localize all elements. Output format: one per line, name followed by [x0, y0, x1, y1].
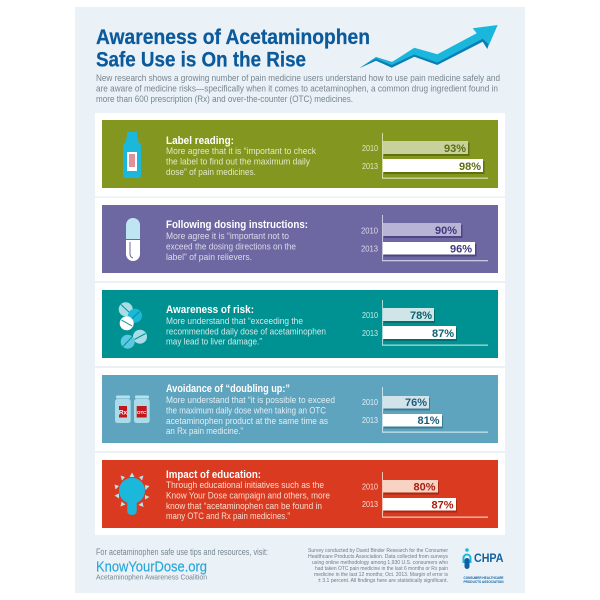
- bar chart: 87%: [431, 500, 454, 512]
- heading: Avoidance of “doubling up:”: [166, 383, 290, 395]
- title: Safe Use is On the Rise: [96, 48, 306, 72]
- bar chart: 78%: [410, 310, 432, 322]
- body text: label” of pain relievers.: [166, 252, 252, 263]
- body text: Know Your Dose campaign and others, more: [166, 490, 330, 502]
- body text: the maximum daily dose when taking an OTC: [166, 406, 326, 416]
- body text: acetaminophen product at the same time as: [166, 416, 328, 427]
- panel: impact of education: [95, 453, 505, 535]
- bar chart: [362, 133, 488, 179]
- survey note: had taken OTC pain medicine in the last 6 months or Rx pain: [315, 566, 448, 572]
- title: Awareness of Acetaminophen: [96, 26, 370, 49]
- icon: Rx and OTC bottles: [115, 396, 150, 423]
- title: [96, 26, 370, 72]
- footer: resources: Acetaminophen Awareness Coalition: [96, 574, 207, 582]
- intro text: New research shows a growing number of pain medicine users understand how to use pain medicine safely and: [96, 73, 500, 84]
- bar chart: 2010: [362, 398, 378, 407]
- body text: an Rx pain medicine.”: [166, 426, 243, 437]
- body text: the label to find out the maximum daily: [166, 156, 310, 168]
- heading: Following dosing instructions:: [166, 219, 308, 231]
- survey note: ± 3.1 percent. All findings here are statistically significant.: [318, 578, 448, 584]
- body text: More understand that “exceeding the: [166, 316, 303, 327]
- icon: pills: [119, 302, 147, 349]
- bar chart: 2010: [362, 144, 378, 153]
- body text: [166, 146, 316, 178]
- icon: Rx and OTC bottles: OTC: [137, 410, 147, 415]
- heading: Impact of education:: [166, 469, 261, 481]
- bar chart: [362, 387, 488, 433]
- survey note: using online methodology among 1,930 U.S. consumers who: [312, 560, 448, 566]
- icon: rising arrow: [359, 25, 498, 68]
- survey note: Healthcare Products Association. Data collected from surveys: [308, 554, 449, 560]
- panel: awareness of risk: [95, 283, 505, 366]
- body text: may lead to liver damage.”: [166, 336, 262, 348]
- icon: Rx and OTC bottles: Rx: [119, 410, 128, 416]
- intro text: more than 600 prescription (Rx) and over-the-counter (OTC) medicines.: [96, 94, 353, 105]
- body text: More agree that it is “important to check: [166, 146, 316, 157]
- body text: Through educational initiatives such as the: [166, 480, 324, 491]
- body text: dose” of pain medicines.: [166, 167, 256, 178]
- body text: exceed the dosing directions on the: [166, 242, 296, 252]
- intro text: [96, 73, 500, 105]
- bar chart: 87%: [432, 328, 454, 340]
- bar chart: 76%: [405, 397, 427, 409]
- bar chart: [362, 472, 488, 518]
- panel: avoidance of doubling up: [95, 368, 505, 451]
- bar chart: 90%: [435, 225, 457, 237]
- icon: medicine bottle: [123, 132, 141, 178]
- heading: Awareness of risk:: [166, 304, 254, 316]
- website logo: KnowYourDose.org: [96, 560, 207, 576]
- bar chart: 2013: [362, 416, 378, 425]
- body text: know that “acetaminophen can be found in: [166, 501, 322, 512]
- bar chart: [361, 215, 488, 261]
- panel: label reading: [95, 113, 505, 196]
- bar chart: 2013: [362, 329, 378, 338]
- CHPA logo: [462, 548, 504, 584]
- footer: resources: For acetaminophen safe use tips and resources, visit:: [96, 547, 268, 557]
- icon: capsule: [126, 218, 140, 261]
- body text: [166, 395, 335, 437]
- panel: following dosing instructions: [95, 198, 505, 281]
- bar chart: 2013: [362, 500, 378, 509]
- bar chart: 2013: [362, 162, 378, 171]
- survey note: medicine in the last 12 months; Oct. 2013. Margin of error is: [314, 572, 449, 578]
- survey note: Survey conducted by David Binder Research for the Consumer: [308, 548, 448, 554]
- intro text: are aware of medicine risks—specifically when it comes to acetaminophen, a common drug ingredient found in: [96, 84, 498, 94]
- CHPA logo: CHPA: [474, 551, 504, 565]
- body text: [166, 480, 330, 522]
- bar chart: 2010: [361, 226, 379, 236]
- body text: [166, 316, 326, 348]
- CHPA logo: CONSUMER HEALTHCARE: [464, 576, 504, 580]
- body text: [166, 231, 296, 263]
- footer: resources: [96, 547, 268, 582]
- body text: recommended daily dose of acetaminophen: [166, 326, 326, 338]
- heading: Label reading:: [166, 135, 234, 147]
- body text: More agree it is “important not to: [166, 231, 289, 242]
- survey note: [308, 548, 449, 584]
- bar chart: 96%: [450, 244, 472, 256]
- bar chart: 81%: [417, 415, 440, 427]
- bar chart: 2010: [362, 482, 378, 492]
- icon: light bulb: [114, 472, 150, 515]
- bar chart: 93%: [444, 143, 466, 155]
- bar chart: 2013: [361, 244, 379, 254]
- bar chart: 80%: [413, 482, 436, 494]
- bar chart: 2010: [362, 311, 378, 320]
- body text: More understand that “it is possible to exceed: [166, 395, 335, 406]
- body text: many OTC and Rx pain medicines.”: [166, 511, 290, 522]
- bar chart: [362, 300, 488, 346]
- bar chart: 98%: [459, 161, 481, 173]
- background card: [75, 7, 525, 593]
- CHPA logo: PRODUCTS ASSOCIATION: [464, 580, 504, 584]
